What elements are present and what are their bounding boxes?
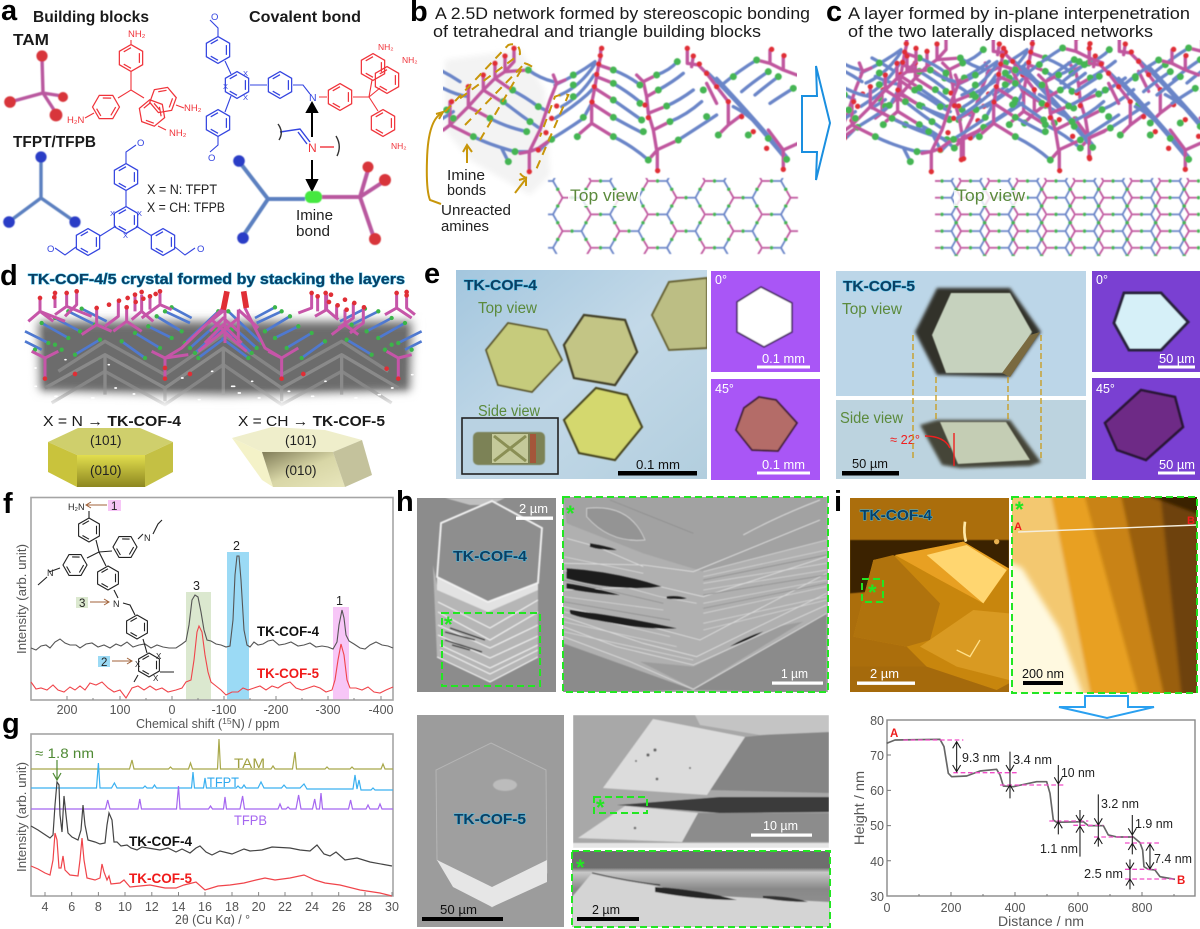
molecule: assigned nitrogen sites: H₂N xyxy=(68,502,84,512)
panel letter i: i xyxy=(834,486,842,518)
molecule: imine-linked structure: N xyxy=(309,92,317,104)
step labels: 10 nm xyxy=(1061,766,1095,780)
arrow: b to c xyxy=(802,66,830,180)
callout: 1.8 nm xyxy=(35,745,94,780)
peak labels xyxy=(193,539,343,608)
polarized image: TK-COF-5 at 0°: 50 µm xyxy=(1159,352,1195,366)
crystal: TK-COF-4 shape: (010) xyxy=(90,463,122,478)
crystal: TK-COF-5 shape: (010) xyxy=(285,463,317,478)
label TAM: TAM xyxy=(13,32,49,49)
pattern: TAM xyxy=(31,739,393,769)
callout 1: 1 xyxy=(111,501,117,513)
label TAM: TAM xyxy=(234,755,265,771)
panel i: AFM images and height profile xyxy=(834,486,1200,929)
step labels: 7.4 nm xyxy=(1154,852,1192,866)
panel c: interpenetrated layer xyxy=(827,6,1200,257)
highlight band: peak 3 xyxy=(186,592,211,700)
label: side view: Side view xyxy=(478,403,541,420)
molecule: assigned nitrogen sites xyxy=(38,502,174,683)
annotations: imine bonds and unreacted amines: Imine xyxy=(447,167,485,184)
x-axis tick labels: 200 xyxy=(941,901,961,915)
AFM: zoomed step region: * xyxy=(1015,497,1024,522)
x-axis tick labels: 16 xyxy=(198,900,212,914)
spectrum: TK-COF-5 xyxy=(31,626,393,698)
SEM: TK-COF-5 cross section: * xyxy=(596,795,605,820)
x-axis tick labels: 0 xyxy=(884,901,891,915)
molecule: imine-linked structure: NH₂ xyxy=(402,55,418,65)
polarized image: TK-COF-5 at 45°: 50 µm xyxy=(1159,458,1195,472)
network diagram c xyxy=(846,40,1200,176)
molecule: TFPT/TFPB structure: O xyxy=(197,244,204,255)
callout 3 xyxy=(76,597,109,610)
molecule: imine-linked structure: NH₂ xyxy=(391,141,407,151)
molecule: TAM structure: NH₂ xyxy=(184,103,202,114)
label: imine bond: bond xyxy=(296,223,330,240)
polarized image: TK-COF-5 at 45° xyxy=(1092,378,1200,480)
step labels: 3.4 nm xyxy=(1013,753,1052,767)
x-axis tick labels: 14 xyxy=(172,900,185,914)
x-axis ticks xyxy=(67,696,381,700)
chart: height profile xyxy=(851,714,1195,929)
callout: 1.8 nm: ≈ 1.8 nm xyxy=(35,745,94,761)
x-axis tick labels: 18 xyxy=(225,900,239,914)
heading: building blocks: Building blocks xyxy=(33,9,149,26)
molecule: TFPT/TFPB structure: O xyxy=(137,138,144,149)
SEM: TK-COF-4 zoomed layers: * xyxy=(566,501,575,526)
legend: X definitions xyxy=(147,182,225,215)
scale bar xyxy=(618,457,697,476)
x-axis tick labels: 100 xyxy=(110,703,130,717)
callout 2 xyxy=(98,656,132,669)
step labels: 1.1 nm xyxy=(1040,842,1078,856)
y-axis tick labels: 70 xyxy=(870,749,884,763)
y-axis title: Intensity (arb. unit) xyxy=(15,544,29,654)
molecule: assigned nitrogen sites: X xyxy=(153,674,159,683)
label TK-COF-5: TK-COF-5 xyxy=(257,666,319,681)
x-axis tick labels: 800 xyxy=(1132,901,1152,915)
SEM: TK-COF-4 zoomed layers xyxy=(563,497,828,693)
crystal: TK-COF-5 shape xyxy=(232,427,372,487)
SEM: TK-COF-5 crystal: TK-COF-5 xyxy=(454,811,526,828)
y-axis tick labels: 60 xyxy=(870,784,884,798)
y-axis title: Height / nm xyxy=(851,771,867,845)
polarized image: TK-COF-5 at 0° xyxy=(1092,271,1200,372)
AFM: zoomed step region: B xyxy=(1187,515,1195,527)
panel a: building blocks and covalent bond xyxy=(1,0,418,255)
polarized image: TK-COF-4 at 0°: 0.1 mm xyxy=(762,352,805,366)
guide lines between views xyxy=(913,335,1041,458)
icon: TFPT triangle model xyxy=(3,151,81,228)
y-axis title: Intensity (arb. unit) xyxy=(15,762,29,872)
top-view lattice b xyxy=(548,178,798,254)
peak labels: 1 xyxy=(336,594,343,608)
x-axis tick labels: 10 xyxy=(118,900,132,914)
polarized image: TK-COF-4 at 0°: 0° xyxy=(715,273,727,287)
label TFPT: TFPT xyxy=(207,774,239,790)
panel f: 15N NMR spectra xyxy=(3,488,394,731)
x-axis tick labels: 0 xyxy=(169,703,176,717)
step arrows xyxy=(953,742,1154,889)
x-axis tick labels: 28 xyxy=(358,900,372,914)
x-axis ticks xyxy=(45,892,392,896)
SEM: TK-COF-5 cross section xyxy=(573,715,829,848)
AFM: TK-COF-4 flake: 2 µm xyxy=(870,667,899,681)
panel e: optical micrographs xyxy=(424,258,1200,480)
panel d: crystal stacking xyxy=(0,260,425,487)
AFM: TK-COF-4 flake xyxy=(850,498,1009,693)
AFM: zoomed step region xyxy=(1005,490,1200,700)
network diagram b xyxy=(440,48,798,172)
step labels: 9.3 nm xyxy=(962,751,1000,765)
molecule: TFPT/TFPB structure: X xyxy=(123,231,128,240)
x-axis tick labels: -400 xyxy=(368,703,394,717)
molecule: TFPT/TFPB structure: X xyxy=(137,209,142,218)
polarized image: TK-COF-4 at 45° xyxy=(711,379,820,480)
SEM: TK-COF-5 zoomed gap xyxy=(572,851,830,927)
x-axis tick labels: 200 xyxy=(57,703,77,717)
molecule: TFPT/TFPB structure xyxy=(47,138,204,255)
y-axis tick labels xyxy=(870,714,884,904)
pattern: TK-COF-4 xyxy=(31,782,392,866)
label: X = N gives TK-COF-4: X = N → TK-COF-4 xyxy=(43,413,182,430)
x-axis tick labels: -200 xyxy=(263,703,289,717)
top-view lattice c xyxy=(935,178,1200,256)
arrow: down to model xyxy=(307,160,317,190)
annotations: imine bonds and unreacted amines: bonds xyxy=(447,182,486,199)
micrograph: TK-COF-5 top view: Top view xyxy=(842,301,903,318)
molecule: assigned nitrogen sites: X xyxy=(156,652,162,661)
panel g: PXRD patterns xyxy=(2,708,399,927)
crystal: TK-COF-4 shape: (101) xyxy=(90,433,122,448)
highlight band: peak 1 xyxy=(333,607,349,700)
x-axis tick labels: 24 xyxy=(305,900,319,914)
SEM: TK-COF-5 zoomed gap: 2 µm xyxy=(592,902,620,917)
x-axis tick labels: 400 xyxy=(1005,901,1025,915)
step labels: 2.5 nm xyxy=(1084,867,1123,881)
crystal: TK-COF-4 shape xyxy=(48,428,173,487)
endpoint labels A and B: B xyxy=(1177,875,1185,887)
polarized image: TK-COF-5 at 45°: 45° xyxy=(1096,382,1115,396)
x-axis title: N) / ppm xyxy=(232,717,280,731)
micrograph: TK-COF-5 top view: TK-COF-5 xyxy=(843,278,915,295)
step labels: 1.9 nm xyxy=(1135,817,1173,831)
x-axis tick labels: 30 xyxy=(385,900,399,914)
arrow: up to imine N xyxy=(307,103,317,137)
SEM: TK-COF-4 zoomed layers: 1 µm xyxy=(781,667,808,681)
molecule: TAM structure: NH₂ xyxy=(128,29,146,40)
micrograph: TK-COF-5 top view xyxy=(836,271,1086,396)
label: top view c: Top view xyxy=(956,186,1026,205)
AFM: zoomed step region: 200 nm xyxy=(1022,666,1064,681)
icon: connected model with imine bond xyxy=(233,155,391,245)
label: imine bond: Imine xyxy=(296,207,333,224)
peak labels: 2 xyxy=(233,539,240,553)
dashed step lines xyxy=(903,740,1175,879)
polarized image: TK-COF-5 at 0°: 0° xyxy=(1096,273,1108,287)
shadow behind left network xyxy=(445,50,550,195)
AFM: TK-COF-4 flake: TK-COF-4 xyxy=(860,507,933,524)
label TK-COF-4: TK-COF-4 xyxy=(257,624,319,639)
molecule: imine-linked structure: O xyxy=(208,153,215,164)
label TK-COF-5: TK-COF-5 xyxy=(129,871,192,886)
heading c: of the two laterally displaced networks xyxy=(848,22,1153,41)
fragment: imine bond drawing xyxy=(278,124,339,156)
spectrum: TK-COF-4 xyxy=(31,556,393,650)
label TFPT/TFPB: TFPT/TFPB xyxy=(13,134,96,151)
panel b: 2.5D network xyxy=(410,0,810,254)
endpoint labels A and B xyxy=(890,728,1185,887)
panel letter d: d xyxy=(0,260,18,292)
x-axis tick labels: 22 xyxy=(278,900,292,914)
x-axis title: 15 xyxy=(222,716,232,726)
x-axis tick labels: 4 xyxy=(42,900,49,914)
pattern: TFPT xyxy=(31,763,393,790)
label TK-COF-4: TK-COF-4 xyxy=(464,277,538,294)
y-axis tick labels: 40 xyxy=(870,855,884,869)
SEM: TK-COF-4 crystal: * xyxy=(444,612,453,637)
illustration: stacked COF layers xyxy=(25,291,425,409)
x-axis tick labels: 12 xyxy=(145,900,159,914)
molecule: imine-linked structure xyxy=(206,12,418,164)
SEM: TK-COF-5 cross section: 10 µm xyxy=(763,819,798,833)
molecule: TAM structure: NH₂ xyxy=(169,128,187,139)
molecule: TFPT/TFPB structure: X xyxy=(110,209,115,218)
heading c xyxy=(848,4,1190,41)
chart frame xyxy=(31,498,393,700)
label: top view: Top view xyxy=(478,300,538,317)
AFM: TK-COF-4 flake: * xyxy=(868,580,877,605)
SEM: TK-COF-4 crystal: 2 µm xyxy=(519,502,548,516)
SEM: TK-COF-5 crystal xyxy=(417,715,564,927)
callout 1 xyxy=(86,500,121,513)
x-axis title: Chemical shift ( xyxy=(136,717,222,731)
chart frame and ticks xyxy=(887,720,1195,896)
micrograph: TK-COF-5 side view: ≈ 22° xyxy=(890,432,920,447)
arrow: AFM to profile xyxy=(1059,696,1154,718)
molecule: imine-linked structure: X xyxy=(223,82,228,91)
micrograph: TK-COF-5 side view xyxy=(836,400,1086,479)
x-axis tick labels xyxy=(42,900,399,914)
x-axis tick labels: 8 xyxy=(95,900,102,914)
panel letter g: g xyxy=(2,708,20,740)
molecule: imine-linked structure: X xyxy=(243,69,248,78)
scale bar: 0.1 mm xyxy=(636,457,680,472)
x-axis title: 2θ (Cu Kα) / ° xyxy=(175,913,250,927)
x-axis tick labels xyxy=(57,703,394,717)
micrograph: TK-COF-5 side view: 50 µm xyxy=(852,456,888,471)
highlight band: peak 2 xyxy=(227,552,249,700)
SEM: TK-COF-4 crystal: TK-COF-4 xyxy=(453,548,528,565)
chart frame xyxy=(31,734,393,896)
molecule: imine-linked structure: O xyxy=(211,12,218,23)
label: top view b: Top view xyxy=(570,186,639,205)
peak labels: 3 xyxy=(193,579,200,593)
polarized image: TK-COF-4 at 45°: 0.1 mm xyxy=(762,458,805,472)
polarized image: TK-COF-4 at 0° xyxy=(711,271,820,372)
label TFPB: TFPB xyxy=(234,812,267,828)
y-axis tick labels: 50 xyxy=(870,819,884,833)
callout 2: 2 xyxy=(101,657,107,669)
step labels xyxy=(962,751,1192,881)
x-axis tick labels xyxy=(884,901,1152,915)
x-axis tick labels: -300 xyxy=(315,703,341,717)
heading c: A layer formed by in-plane interpenetration xyxy=(848,4,1190,23)
legend: X definitions: X = N: TFPT xyxy=(147,182,217,197)
molecule: imine-linked structure: X xyxy=(243,93,248,102)
callout 3: 3 xyxy=(79,598,85,610)
label: imine bond xyxy=(296,207,333,240)
step labels: 3.2 nm xyxy=(1101,797,1139,811)
heading b: of tetrahedral and triangle building blocks xyxy=(433,22,761,41)
micrograph: TK-COF-4 crystals xyxy=(456,270,707,479)
x-axis tick labels: -100 xyxy=(211,703,237,717)
molecule: TAM structure: H₂N xyxy=(67,115,85,126)
y-axis tick labels: 80 xyxy=(870,714,884,728)
molecule: assigned nitrogen sites: X xyxy=(135,660,141,669)
pattern: TK-COF-5 xyxy=(31,833,392,896)
label TK-COF-4: TK-COF-4 xyxy=(129,834,192,849)
x-axis tick labels: 20 xyxy=(252,900,266,914)
panel h: SEM images xyxy=(396,486,830,927)
x-axis title: Distance / nm xyxy=(998,913,1084,929)
annotations: imine bonds and unreacted amines: amines xyxy=(441,218,489,235)
heading b xyxy=(433,4,810,41)
y-axis tick labels: 30 xyxy=(870,890,884,904)
x-axis tick labels: 6 xyxy=(68,900,75,914)
panel letter e: e xyxy=(424,258,440,290)
AFM: zoomed step region: A xyxy=(1014,521,1022,533)
heading b: A 2.5D network formed by stereoscopic bonding xyxy=(435,4,810,23)
annotations: imine bonds and unreacted amines: Unreacted xyxy=(441,202,511,219)
molecule: TFPT/TFPB structure: O xyxy=(47,244,54,255)
molecule: assigned nitrogen sites: N xyxy=(144,533,150,543)
x-axis tick labels: 26 xyxy=(332,900,346,914)
panel letter h: h xyxy=(396,486,414,518)
legend: X definitions: X = CH: TFPB xyxy=(147,200,225,215)
icon: TAM tetrahedral model xyxy=(4,50,68,121)
SEM: TK-COF-4 crystal xyxy=(417,498,556,692)
fragment: imine bond drawing: N xyxy=(308,141,317,155)
profile curve xyxy=(887,739,1175,889)
inset: side view crystal xyxy=(462,418,558,474)
molecule: TAM structure xyxy=(67,29,202,139)
pattern: TFPB xyxy=(31,786,393,809)
label: X = CH gives TK-COF-5: X = CH → TK-COF-5 xyxy=(238,413,385,430)
micrograph: TK-COF-5 side view: Side view xyxy=(840,410,904,427)
crystal: TK-COF-5 shape: (101) xyxy=(285,433,317,448)
heading: covalent bond: Covalent bond xyxy=(249,9,361,26)
molecule: assigned nitrogen sites: N xyxy=(113,599,120,609)
SEM: TK-COF-5 crystal: 50 µm xyxy=(440,902,477,917)
x-axis tick labels: 600 xyxy=(1068,901,1088,915)
molecule: imine-linked structure: NH₂ xyxy=(378,42,394,52)
endpoint labels A and B: A xyxy=(890,728,898,740)
heading d: TK-COF-4/5 crystal formed by stacking the layers xyxy=(28,271,405,288)
SEM: TK-COF-5 zoomed gap: * xyxy=(576,855,585,880)
molecule: assigned nitrogen sites: N xyxy=(47,568,54,578)
panel letter f: f xyxy=(3,488,13,520)
polarized image: TK-COF-4 at 45°: 45° xyxy=(715,382,734,396)
annotations: imine bonds and unreacted amines xyxy=(427,44,568,235)
